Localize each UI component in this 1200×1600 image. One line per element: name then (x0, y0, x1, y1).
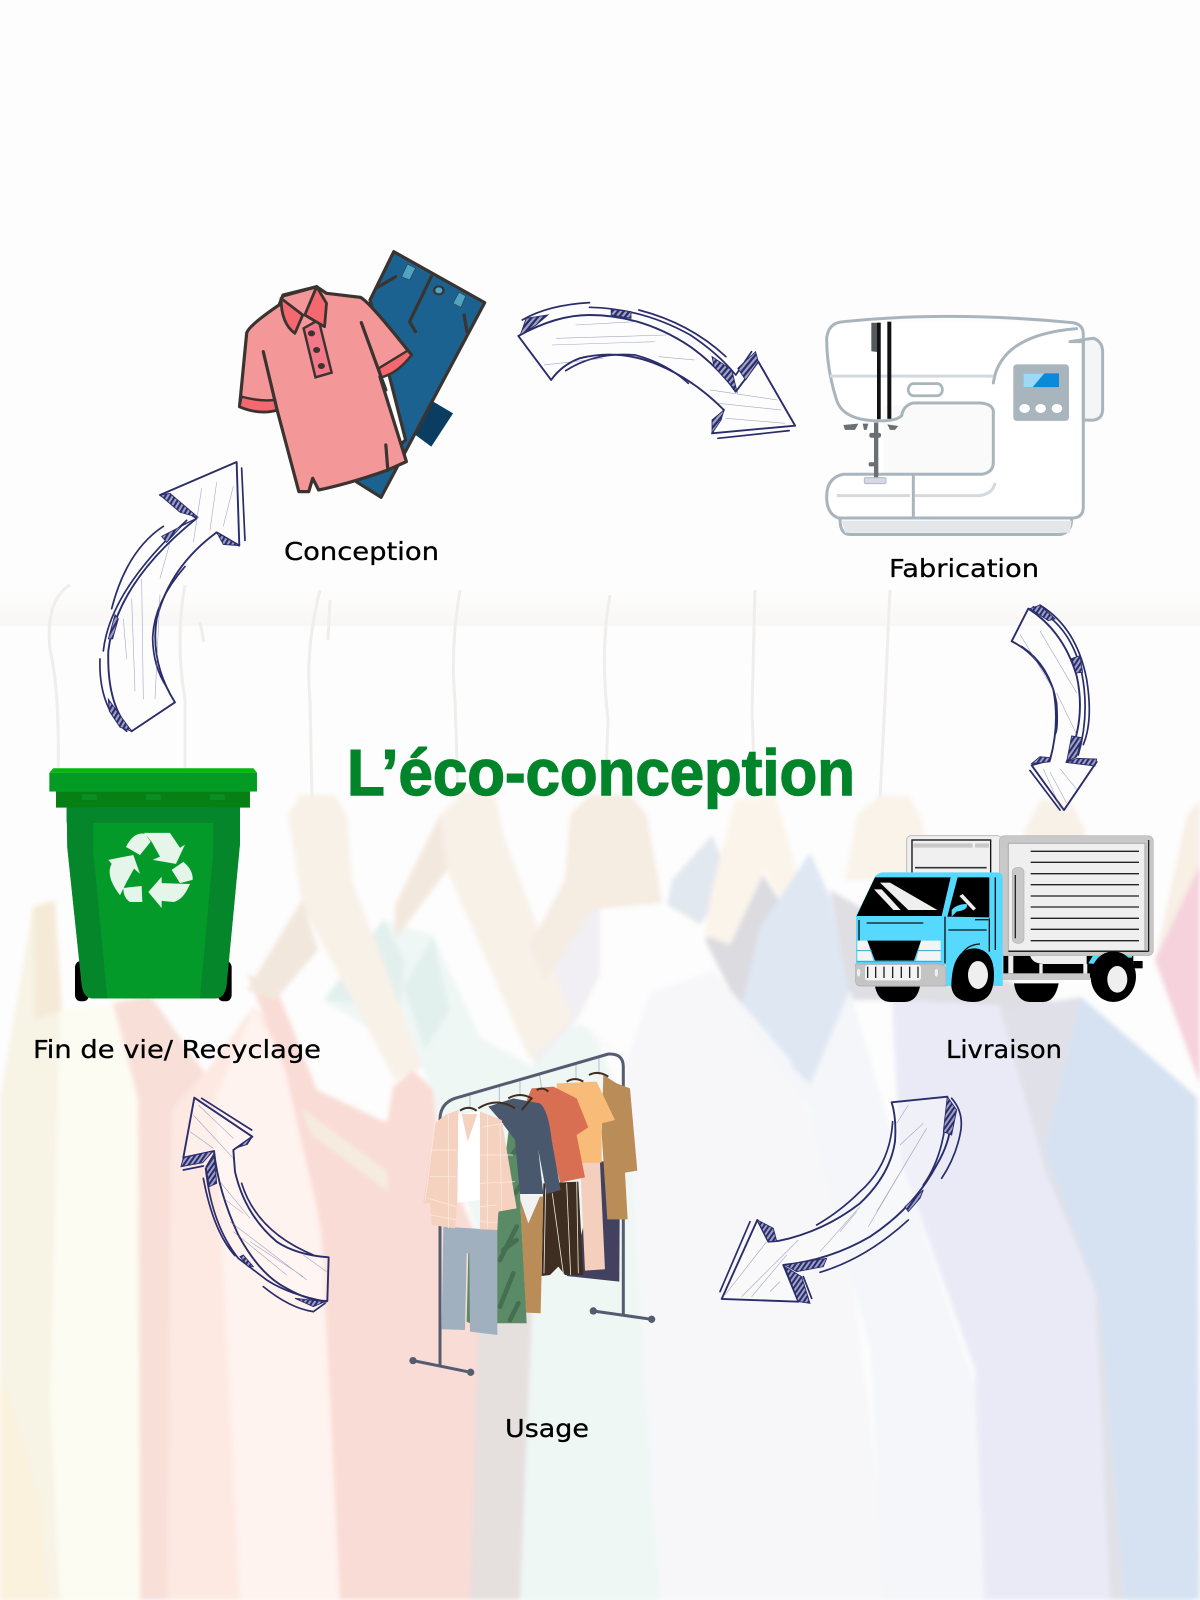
salmon garments (113, 995, 205, 1600)
denim and shadow behind collars (667, 835, 730, 925)
lavender (892, 1000, 1110, 1600)
white shirt 2 (740, 990, 985, 1600)
label: Usage: Usage (505, 1414, 589, 1443)
wood bar seen through neckline (150, 1095, 390, 1190)
arrow: fin de vie to conception (100, 462, 245, 731)
icon: clothes rack (usage) (409, 1054, 655, 1376)
white shirt (577, 905, 885, 1600)
arrow: conception to fabrication (518, 303, 795, 438)
title: L’éco-conception (347, 736, 855, 809)
mint garment behind (323, 920, 690, 1600)
label: Livraison: Livraison (946, 1035, 1062, 1064)
arrow: fabrication to livraison (1012, 605, 1097, 810)
hangers wood (247, 790, 1200, 1080)
label: Fin de vie / Recyclage: Fin de vie/ Recyclage (33, 1035, 321, 1064)
arrow: usage to fin de vie (181, 1098, 329, 1312)
icon: recycling symbol (108, 833, 193, 908)
blue (1045, 997, 1200, 1600)
arrow: livraison to usage (720, 1097, 961, 1303)
grey strip (470, 1240, 535, 1600)
yellow / cream garments (0, 907, 60, 1600)
icon: clothes (conception) (240, 252, 485, 497)
icon: sewing machine (fabrication) (827, 316, 1103, 535)
icon: delivery truck (livraison) (856, 836, 1153, 1002)
icon: recycling bin (fin de vie) (49, 768, 257, 1001)
label: Conception: Conception (284, 537, 439, 566)
label: Fabrication: Fabrication (889, 554, 1039, 583)
